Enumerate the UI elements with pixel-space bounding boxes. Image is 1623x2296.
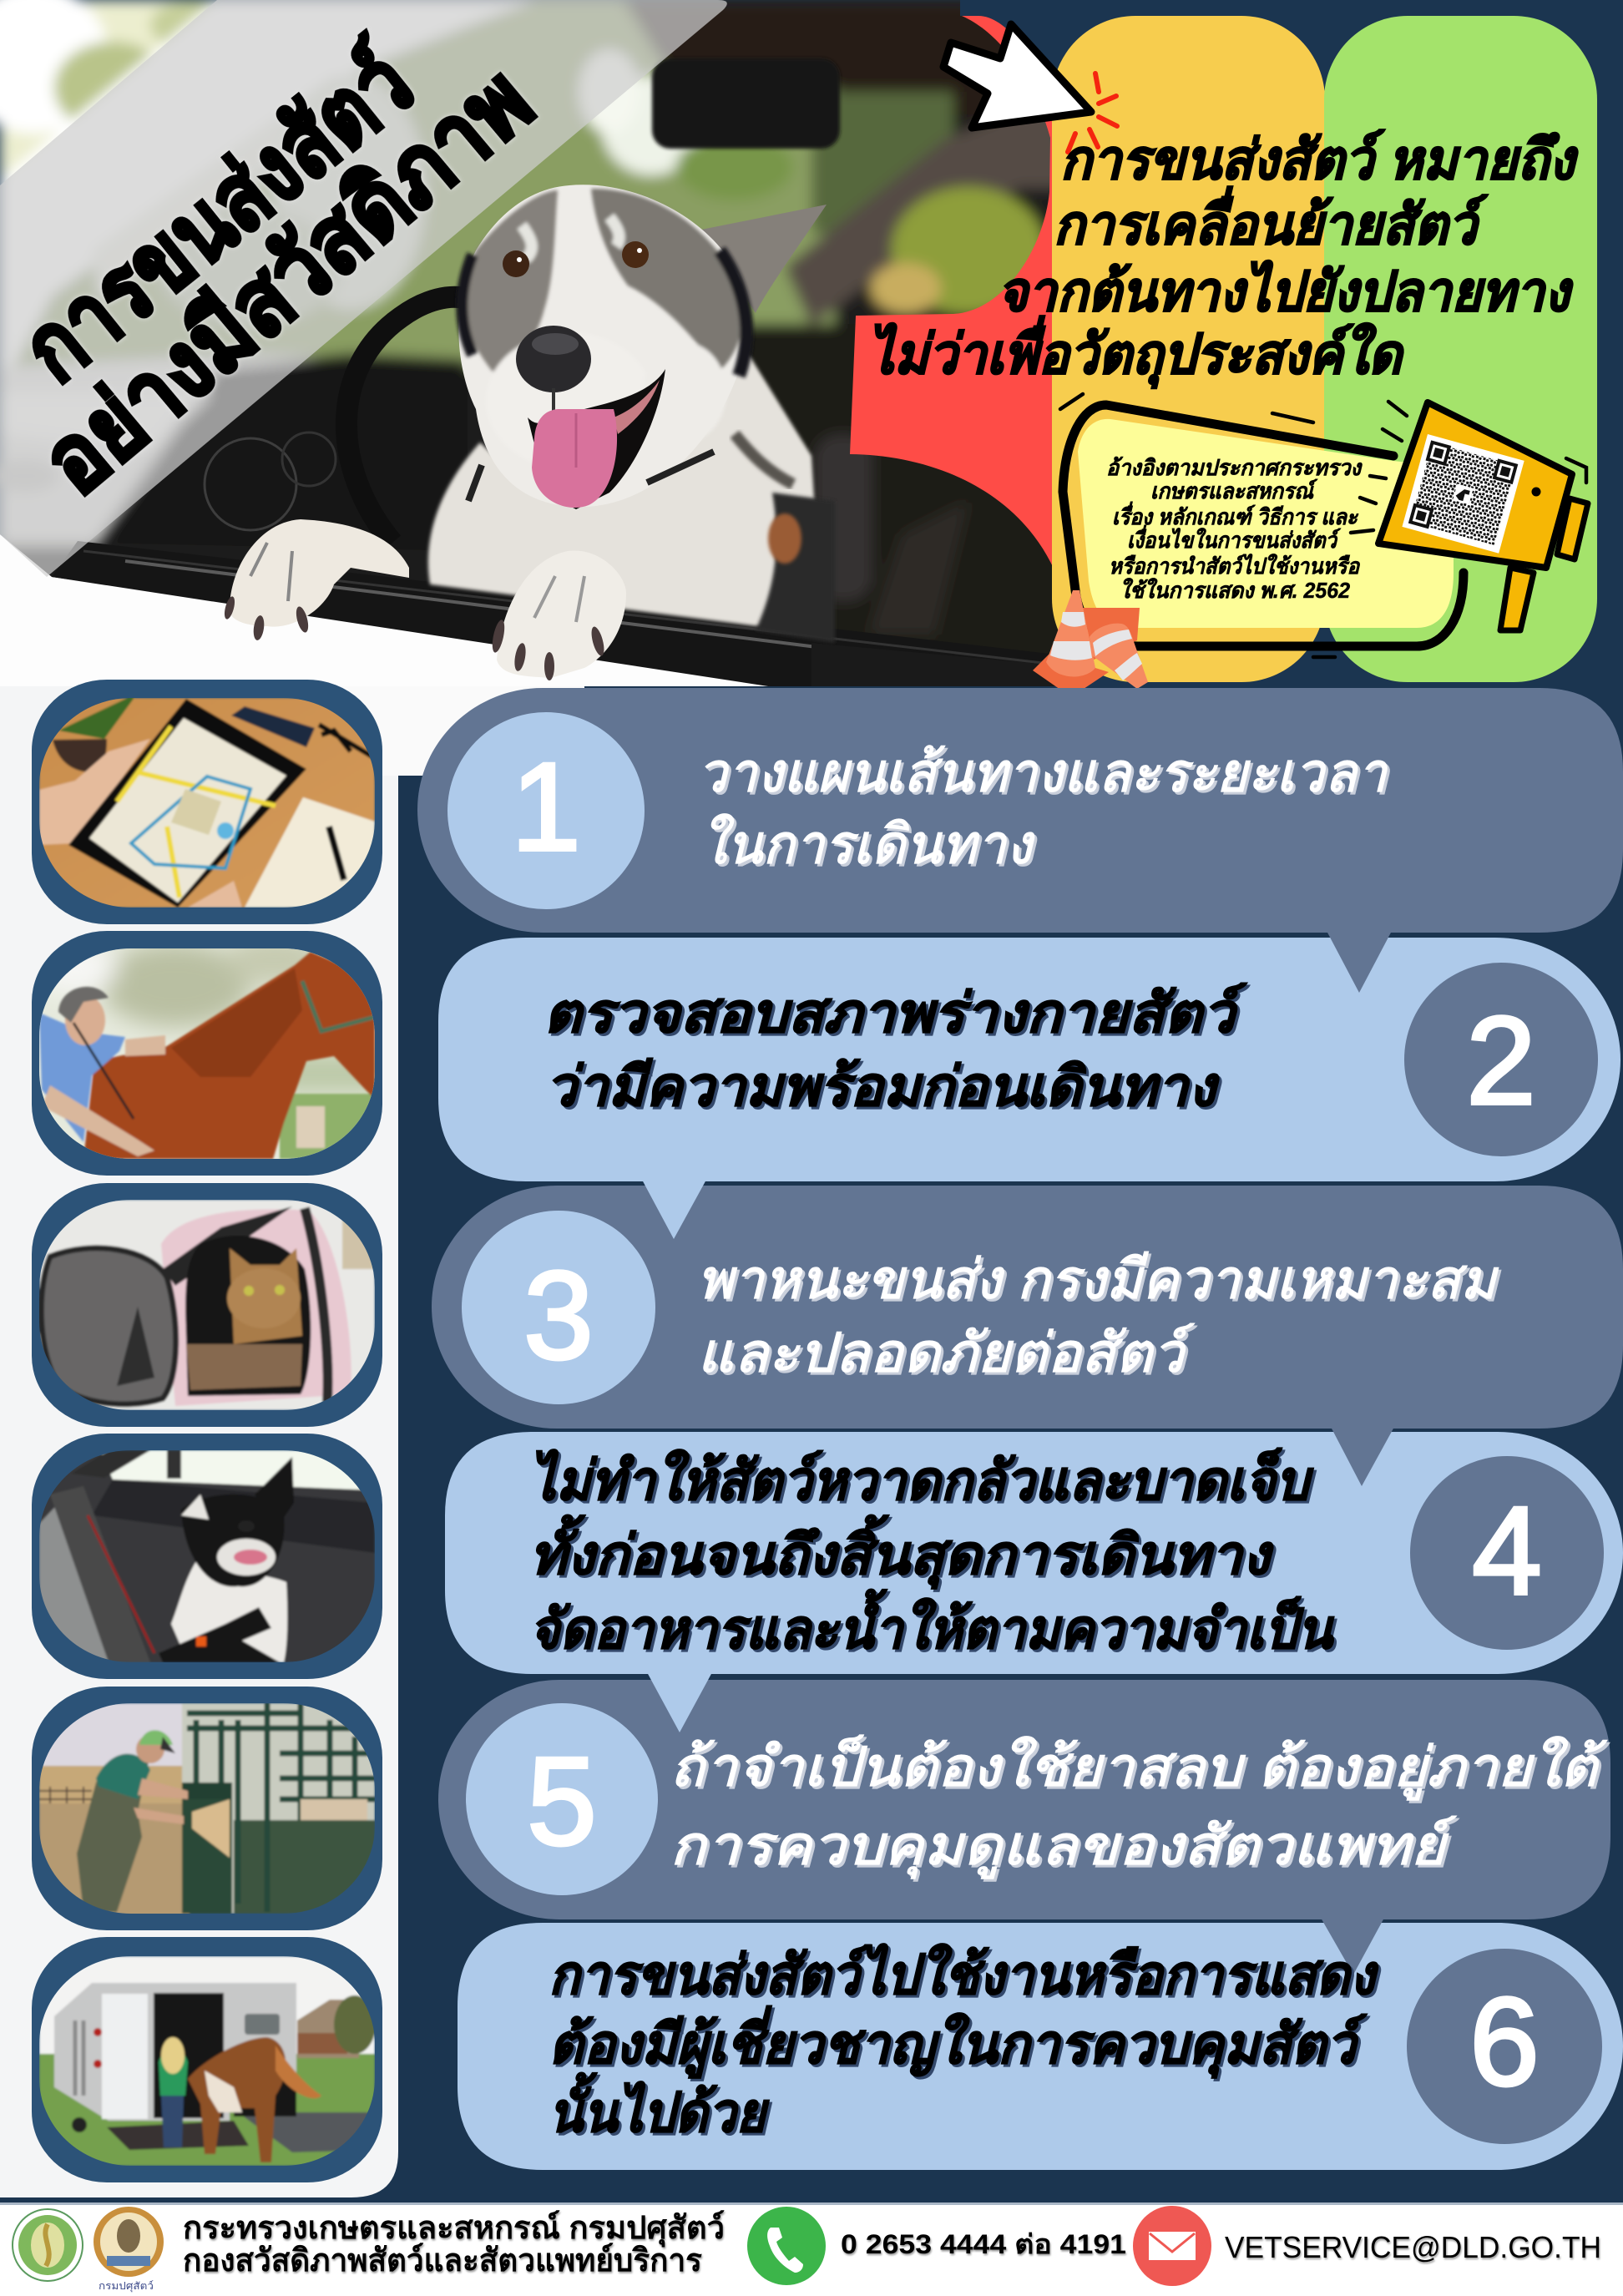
photo frame 1: tablet route map	[32, 680, 382, 924]
megaphone with QR code	[1378, 402, 1588, 630]
step 3 number: 3	[523, 1245, 594, 1385]
right cone, lying	[1083, 608, 1148, 689]
red sparkle rays	[1068, 73, 1117, 152]
pointer arrow	[943, 24, 1117, 152]
steering wheel	[205, 297, 468, 543]
bubble text: หรือการนำสัตว์ไปใช้งานหรือ	[1109, 554, 1360, 579]
step 3 panel	[432, 1180, 1623, 1429]
organisation text: กระทรวงเกษตรและสหกรณ์ กรมปศุสัตว์	[183, 2210, 725, 2248]
megaphone handle	[1500, 568, 1534, 630]
step 2 panel	[438, 931, 1620, 1181]
step 5 text: ถ้าจำเป็นต้องใช้ยาสลบ ต้องอยู่ภายใต้	[670, 1734, 1608, 1801]
title banner	[0, 0, 727, 577]
step 5 panel	[438, 1672, 1610, 1919]
step 5 number: 5	[527, 1731, 597, 1871]
dog left paw	[223, 519, 409, 641]
logo: ministry of agriculture	[13, 2209, 83, 2281]
step 6 text: นั้นไปด้วย	[549, 2072, 770, 2143]
step 1 circle	[447, 712, 645, 909]
decorative ticks	[1060, 394, 1586, 657]
left white panel	[0, 668, 398, 2197]
step 2 text: ว่ามีความพร้อมก่อนเดินทาง	[545, 1055, 1220, 1117]
white door extension behind step 1	[334, 680, 584, 776]
step 1 number: 1	[511, 736, 581, 877]
yellow pill	[1052, 16, 1325, 682]
logo: department of livestock development	[94, 2207, 164, 2293]
hero photo: dog looking out of a car window	[0, 0, 1085, 735]
photo frame 5: vet with cattle chute	[32, 1687, 382, 1930]
dog tongue	[532, 409, 617, 508]
traffic cones	[1033, 590, 1148, 697]
megaphone back	[1557, 498, 1588, 559]
pointer from step 5	[1321, 1918, 1384, 1975]
reference speech bubble	[1060, 394, 1586, 657]
bubble fill	[1078, 419, 1454, 628]
step 6 text: การขนส่งสัตว์ไปใช้งานหรือการแสดง	[549, 1943, 1378, 2005]
step 2 number: 2	[1466, 990, 1536, 1130]
dog	[223, 185, 835, 680]
step 4 text	[529, 1447, 1335, 1660]
dog nose	[516, 326, 591, 411]
step 3 text	[697, 1248, 1499, 1383]
step 3 text: พาหนะขนส่ง กรงมีความเหมาะสม	[697, 1248, 1499, 1310]
email address: VETSERVICE@DLD.GO.TH	[1225, 2230, 1601, 2264]
title line 2: อย่างมีสวัสดิภาพ	[23, 48, 551, 513]
definition text: การขนส่งสัตว์ หมายถึง	[1060, 129, 1579, 190]
pointer from step 3	[1331, 1427, 1394, 1486]
phone number: 0 2653 4444 ต่อ 4191	[841, 2229, 1126, 2259]
pointer from step 4	[647, 1672, 712, 1732]
dog mouth	[528, 369, 665, 509]
step 6 panel	[458, 1918, 1623, 2170]
footer band	[0, 2202, 1623, 2296]
bubble text: ใช้ในการแสดง พ.ศ. 2562	[1120, 578, 1351, 603]
step 1 text: ในการเดินทาง	[700, 813, 1036, 875]
step 5 text	[670, 1734, 1608, 1879]
rear-view mirror	[652, 58, 840, 149]
QR code	[1402, 434, 1524, 554]
photo frame 2: vet checking horse	[32, 931, 384, 1176]
definition text: จากต้นทางไปยังปลายทาง	[998, 260, 1573, 322]
bubble text: เงื่อนไขในการขนส่งสัตว์	[1127, 524, 1342, 553]
megaphone body	[1378, 402, 1572, 568]
icon: email	[1133, 2206, 1211, 2286]
step 5 circle	[466, 1703, 658, 1895]
step 3 circle	[462, 1211, 655, 1404]
step 1 panel	[417, 688, 1623, 933]
step 2 text	[544, 982, 1248, 1117]
hero photo background: car interior and window	[0, 0, 1085, 701]
red scalloped shape	[850, 16, 1060, 584]
step 2 text: ตรวจสอบสภาพร่างกายสัตว์	[544, 982, 1248, 1044]
bubble outline	[1063, 405, 1464, 646]
bubble text: เกษตรและสหกรณ์	[1150, 478, 1318, 503]
step 5 text: การควบคุมดูแลของสัตวแพทย์	[670, 1814, 1457, 1879]
car door with window sill	[0, 534, 1042, 686]
step 4 circle	[1410, 1456, 1604, 1650]
icon: phone	[747, 2207, 826, 2285]
step 6 text	[549, 1943, 1378, 2143]
green pill	[1324, 16, 1597, 682]
step 4 text: ทั้งก่อนจนถึงสิ้นสุดการเดินทาง	[529, 1515, 1274, 1590]
step 1 text	[697, 741, 1388, 875]
definition text	[868, 129, 1579, 389]
bubble text	[1106, 455, 1363, 603]
logo: department of livestock development: กรมปศุสัตว์	[99, 2280, 154, 2293]
step 6 circle	[1407, 1949, 1602, 2144]
dog head	[458, 185, 746, 507]
dog face grey markings	[461, 189, 746, 469]
pointer from step 2	[642, 1180, 706, 1239]
definition text: การเคลื่อนย้ายสัตว์	[1054, 186, 1489, 255]
step 6 text: ต้องมีผู้เชี่ยวชาญในการควบคุมสัตว์	[549, 2005, 1368, 2079]
photo frame 6: horse and trailer	[32, 1937, 382, 2182]
dog dark shoulder	[756, 493, 835, 643]
step 4 text: จัดอาหารและน้ำให้ตามความจำเป็น	[529, 1589, 1335, 1660]
left cone, standing	[1033, 590, 1109, 697]
dog ear	[701, 205, 827, 313]
dog collar	[468, 452, 714, 501]
organisation text: กองสวัสดิภาพสัตว์และสัตวแพทย์บริการ	[183, 2243, 703, 2278]
photo frame 3: cat in pet carrier	[32, 1183, 382, 1427]
pointer from step 1	[1327, 931, 1392, 993]
photo frame 4: dog with harness in car	[32, 1434, 382, 1679]
step 2 circle	[1404, 963, 1598, 1156]
organisation text	[183, 2210, 725, 2278]
step 4 text: ไม่ทำให้สัตว์หวาดกลัวและบาดเจ็บ	[529, 1447, 1314, 1511]
dog eyes	[503, 241, 649, 277]
dog body	[428, 334, 822, 635]
step 4 panel	[445, 1427, 1623, 1674]
step 6 number: 6	[1469, 1971, 1540, 2111]
bubble text: เรื่อง หลักเกณฑ์ วิธีการ และ	[1112, 501, 1359, 529]
step 3 text: และปลอดภัยต่อสัตว์	[697, 1322, 1195, 1383]
bubble text: อ้างอิงตามประกาศกระทรวง	[1106, 455, 1363, 480]
dog right paw	[490, 551, 626, 680]
step 4 number: 4	[1472, 1480, 1542, 1621]
step 1 text: วางแผนเส้นทางและระยะเวลา	[697, 741, 1388, 803]
definition text: ไม่ว่าเพื่อวัตถุประสงค์ใด	[868, 316, 1405, 389]
